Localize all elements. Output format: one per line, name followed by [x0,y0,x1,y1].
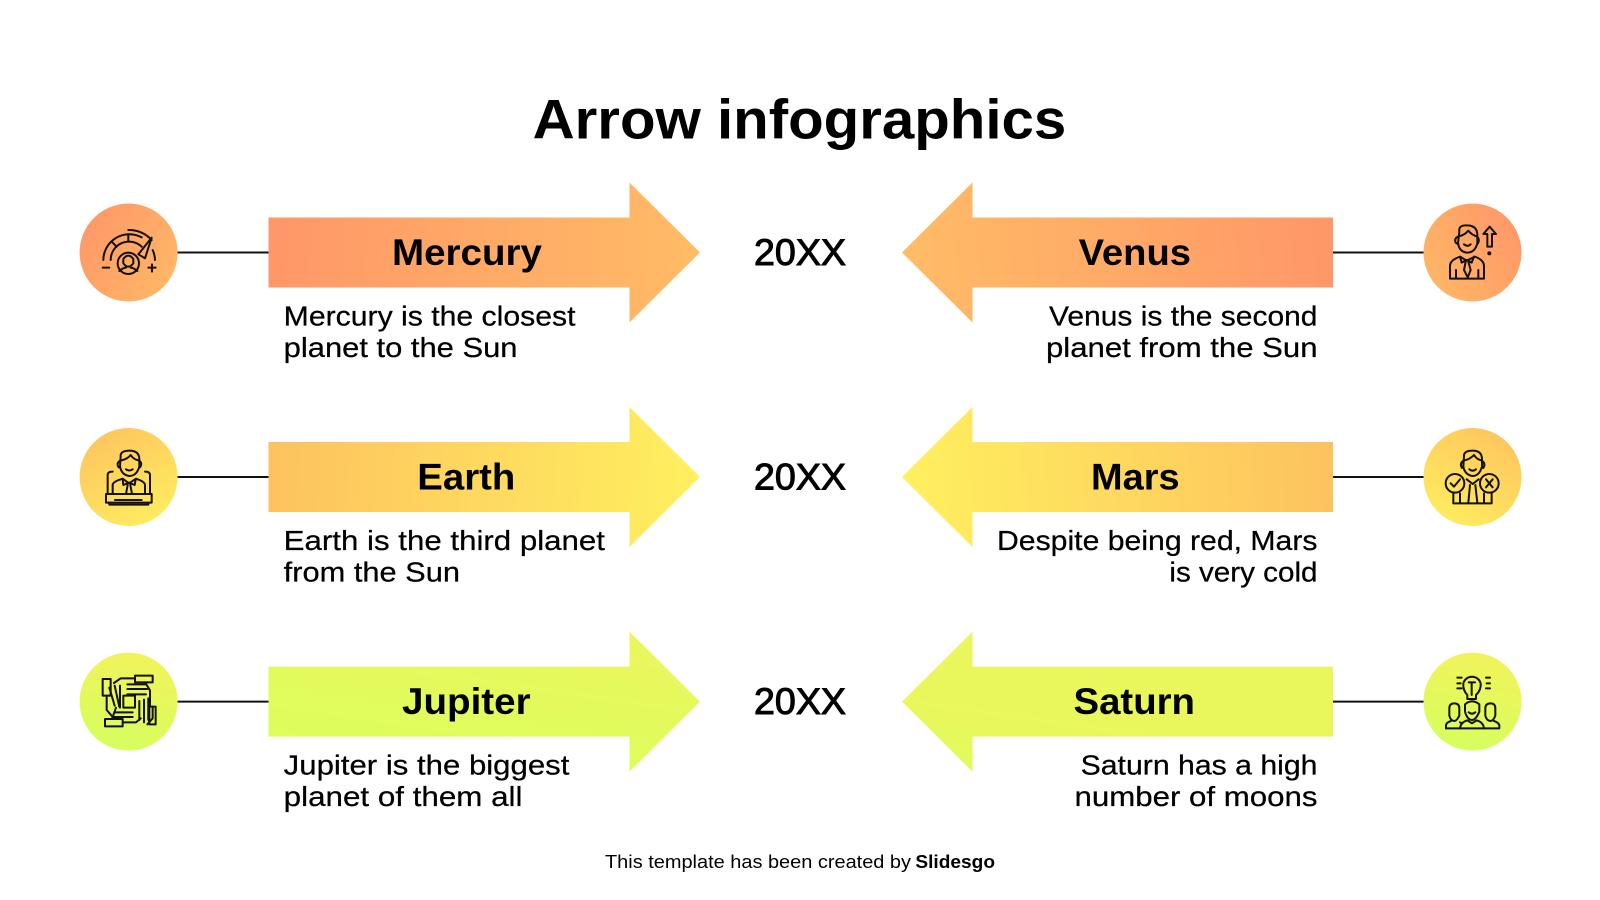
description: Earth: Earth is the third planet [284,525,605,556]
panel: Earth [80,407,700,588]
panel: Venus [902,182,1522,363]
connector line: Mercury [177,252,269,254]
connector line: Saturn [1333,701,1424,703]
icon: person with up arrow [1424,204,1522,302]
connector line: Mars [1333,476,1424,478]
description: Saturn: Saturn has a high [1081,750,1318,781]
icon: speaker at podium [80,428,178,526]
description: Jupiter: planet of them all [284,781,522,812]
description: Mars: is very cold [1169,556,1318,588]
description: Saturn: number of moons [1074,781,1318,812]
label: Venus: Venus [1079,232,1191,273]
label: Earth: Earth [417,456,515,498]
arrow: Jupiter [268,632,700,772]
title: Arrow infographics [533,88,1066,150]
description: Venus: Venus is the second [1049,300,1318,332]
description: Earth [284,525,605,588]
panel: Saturn [902,632,1522,812]
description: Mercury [284,300,576,363]
panel: Jupiter [80,632,700,812]
description: Mercury: Mercury is the closest [284,300,576,332]
description: Mars: Despite being red, Mars [997,525,1318,556]
description: Jupiter [284,750,570,812]
label: Mars: Mars [1091,456,1180,498]
year: Earth: 20XX [754,456,846,498]
icon: four clasped hands [80,653,178,751]
year: Mercury: 20XX [754,232,846,273]
description: Venus [1046,300,1318,363]
icon: gauge with person [80,204,178,302]
connector line: Venus [1333,252,1424,254]
arrow: Venus [902,182,1333,322]
arrow: Mars [902,407,1333,547]
label: Jupiter: Jupiter [402,681,531,722]
connector line: Jupiter [177,701,269,703]
label: Mercury: Mercury [392,232,542,273]
description: Mars [997,525,1318,588]
footer credit: This template has been created by [605,851,912,872]
description: Jupiter: Jupiter is the biggest [284,750,570,781]
description: Saturn [1074,750,1318,812]
connector line: Earth [177,476,269,478]
description: Earth: from the Sun [284,556,460,588]
description: Mercury: planet to the Sun [284,332,518,363]
arrow: Earth [268,407,700,547]
arrow: Mercury [268,182,700,322]
footer credit: Slidesgo [915,851,995,872]
arrow: Saturn [902,632,1333,772]
panel: Mars [902,407,1522,588]
panel: Mercury [80,182,700,363]
icon: team with light bulb [1424,653,1522,751]
description: Venus: planet from the Sun [1046,332,1318,363]
year: Jupiter: 20XX [754,681,846,722]
label: Saturn: Saturn [1074,681,1195,722]
icon: person with check and cross [1424,428,1522,526]
